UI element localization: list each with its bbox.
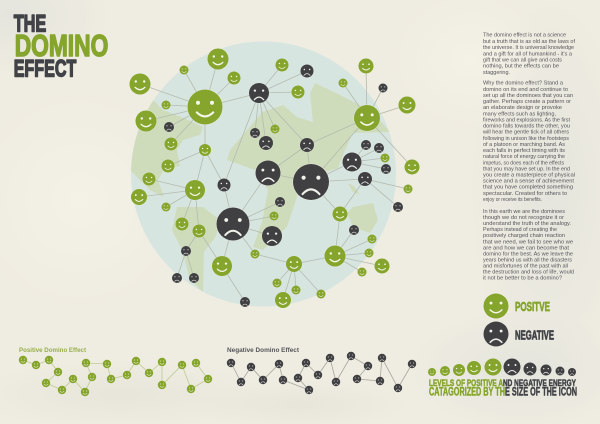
body text: The domino effect is not a science [483,33,567,39]
body text: following in unison like the footsteps [483,136,569,142]
network links [139,59,412,302]
body text: the universe. It is universal knowledge [483,45,575,51]
continents [128,83,390,292]
body text: nothing, but the effects can be [483,64,560,70]
body text: each falls in perfect timing with its [483,148,565,154]
positive domino chain [19,356,212,396]
body text: gather. Perhaps create a pattern or [483,99,571,105]
energy level caption: LEVELS OF POSITIVE A [429,378,503,389]
body text: enjoy or receive its benefits. [483,197,542,203]
body text: domino for the best. As we leave the [483,251,574,257]
body text: natural force of energy carrying the [483,154,566,160]
body text [482,33,575,282]
negative network nodes [164,64,403,307]
title: DOMINO [15,28,108,63]
globe [128,42,396,306]
body text: are and how we can become that [483,245,569,251]
body text: that we need, we fail to see who we [483,239,574,245]
energy level caption [429,378,577,398]
title [14,10,108,83]
body text: set up all the dominoes that you can [483,93,573,99]
body text: science and a sense of achievement [483,179,574,185]
negative domino effect heading: Negative Domino Effect [227,347,300,354]
body text: that you have completed something [483,185,573,191]
energy level scale [428,358,576,376]
body text: it not be better to be a domino? [483,276,563,282]
body text: spectacular. Created for others to [483,191,568,197]
legend: negative [483,321,554,347]
positive domino effect heading: Positive Domino Effect [19,347,87,354]
positive network nodes [129,48,420,308]
body text: In this earth we are the dominoes [483,209,565,215]
title: EFFECT [14,56,76,83]
body text: staggering. [483,70,510,76]
body text: domino on its end and continue to [483,87,569,93]
body text: Why the domino effect? Stand a [483,81,564,87]
body text: you create a masterpiece of physical [483,172,575,178]
negative domino chain [227,352,416,394]
body text: domino falls towards the other, you [483,124,570,130]
body text: years behind us with all the disasters [483,258,572,264]
legend: positive: POSITVE [515,300,550,314]
title: THE [14,10,46,37]
body text: though we do not recognize it or [483,215,564,221]
body text: and misfortunes of the past with all [483,264,568,270]
energy level caption: CATAGORIZED BY TH [429,386,505,398]
body text: of a platoon or marching band. As [483,142,565,148]
body text: that you may have set up. In the end [483,166,570,172]
body text: an elaborate design or provoke [483,105,563,111]
legend: positive [483,293,550,319]
legend: negative: NEGATIVE [515,328,554,342]
body text: positively charged chain reaction [483,233,565,239]
body text: gift that we can all give and costs [483,58,562,64]
body text: and a gift for all of humankind - it's a [483,51,573,57]
body text: but a truth that is as old as the laws of [483,39,575,45]
body text: fireworks and explosions. As the first [483,117,570,123]
body text: the destruction and loss of life, would [483,270,574,276]
body text: many effects such as lighting, [483,111,556,117]
body text: will hear the gentle tick of all others [482,130,569,136]
body text: Perhaps instead of creating the [483,227,558,233]
body text: understand the truth of the analogy. [483,221,571,227]
body text: impetus, so does each of the effects [483,160,564,166]
